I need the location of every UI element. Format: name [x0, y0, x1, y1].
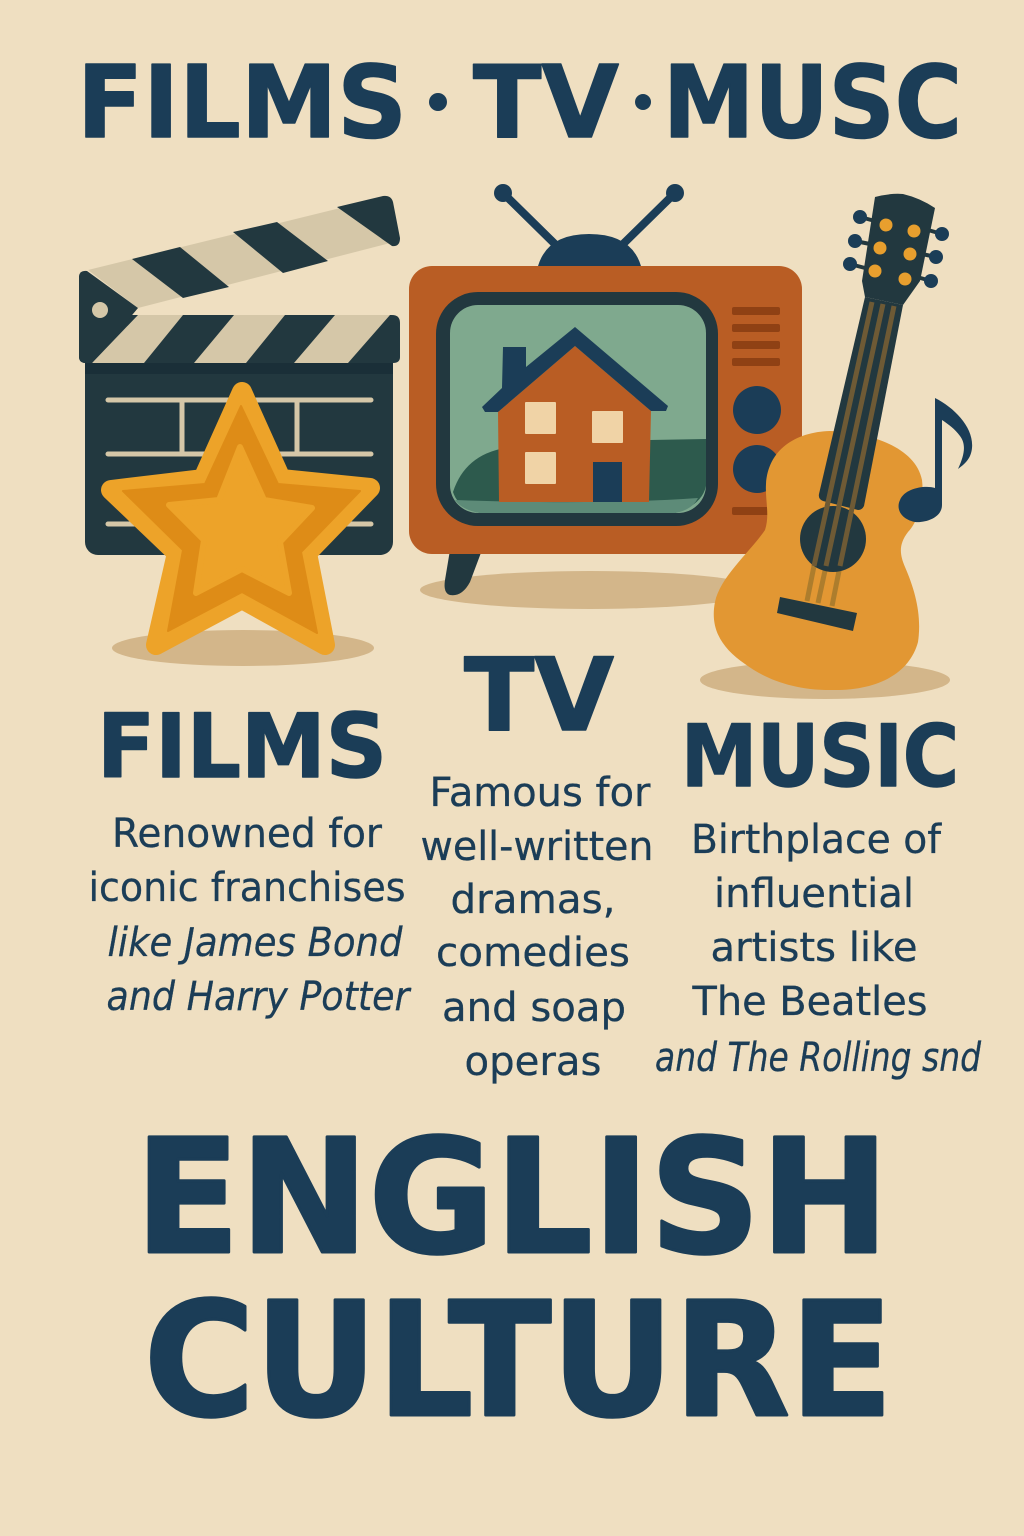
heading: english culture: ENGLISH [135, 1106, 889, 1290]
panel: music [655, 707, 981, 1081]
text: music description: Birthplace of [691, 817, 942, 863]
text: tv description: comedies [436, 930, 630, 976]
text: tv description: operas [464, 1039, 602, 1085]
text: films description [88, 811, 412, 1020]
icon: clapperboard [79, 196, 400, 666]
title: TV [473, 44, 619, 161]
icon: star [111, 392, 370, 645]
text: music description: The Beatles [692, 979, 928, 1025]
text: films description: like James Bond [108, 920, 403, 966]
icon: television [409, 184, 802, 609]
text: tv description: well-written [420, 824, 654, 870]
panel: films [88, 695, 412, 1020]
text: films description: Renowned for [112, 811, 383, 857]
text: tv description: Famous for [430, 770, 651, 816]
panel: tv [420, 636, 654, 1085]
text: tv description: dramas, [450, 877, 616, 923]
heading: music: MUSIC [681, 707, 959, 807]
text: films description: iconic franchises [88, 865, 406, 911]
icon: guitar and music note [700, 194, 972, 699]
text: films description: and Harry Potter [106, 974, 412, 1020]
title: FILMS [77, 44, 407, 161]
heading: english culture: CULTURE [144, 1269, 893, 1453]
heading: films: FILMS [97, 695, 387, 798]
heading: english culture [135, 1106, 893, 1453]
text: music description: artists like [710, 925, 918, 971]
text: tv description [420, 770, 654, 1085]
text: music description [655, 817, 981, 1081]
title [77, 44, 962, 161]
text: music description: influential [714, 871, 914, 917]
title: MUSC [663, 44, 962, 161]
text: tv description: and soap [442, 985, 626, 1031]
heading: tv: TV [464, 636, 614, 754]
